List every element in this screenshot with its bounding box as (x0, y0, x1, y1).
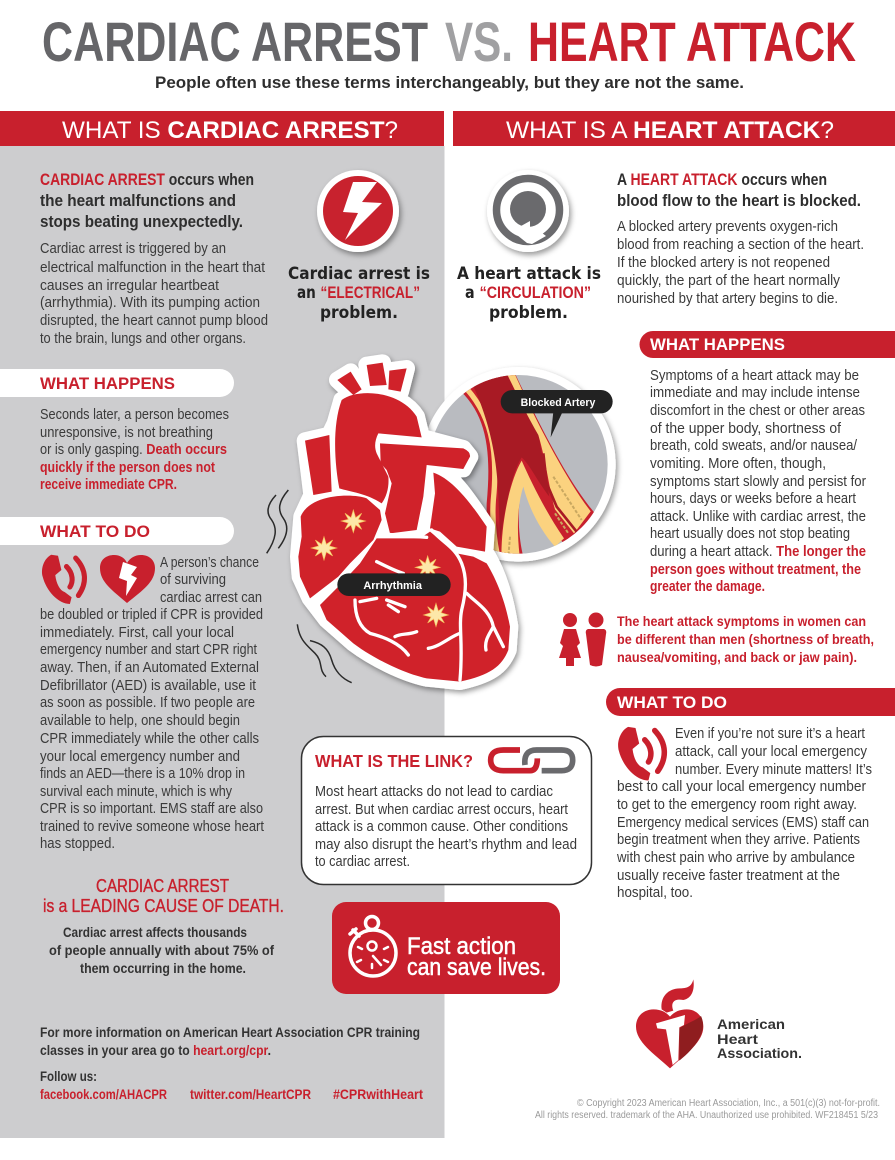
circulation problem caption: problem. (489, 303, 568, 323)
what to do text: cardiac arrest: finds an AED—there is a 10% drop in (40, 766, 245, 782)
logo heart and torch (636, 979, 703, 1068)
artery inset (421, 367, 616, 563)
link text: arrest. But when cardiac arrest occurs, heart (315, 802, 568, 818)
icon: chain link (491, 750, 573, 771)
what happens text: cardiac arrest: Seconds later, a person becomes (40, 407, 229, 423)
circulation problem caption: a “CIRCULATION” (465, 283, 591, 303)
leading cause heading: CARDIAC ARREST (96, 876, 229, 896)
follow us links: twitter.com/HeartCPR (190, 1087, 311, 1102)
what happens pill: cardiac arrest (0, 369, 234, 397)
more information text: classes in your area go to heart.org/cpr. (40, 1043, 271, 1058)
what happens text: heart attack: symptoms start slowly and persist for (650, 474, 866, 490)
women symptoms text (617, 613, 874, 665)
leading cause text (49, 924, 274, 976)
callout: fast action: Fast action (407, 933, 516, 960)
cardiac arrest explanation text: Cardiac arrest is triggered by an (40, 241, 226, 257)
cardiac arrest explanation text: (arrhythmia). With its pumping action (40, 295, 260, 311)
what to do bar: heart attack: WHAT TO DO (617, 694, 727, 712)
leading cause text: them occurring in the home. (80, 960, 246, 976)
circulation problem caption (457, 264, 601, 323)
panel: cardiac arrest background (0, 146, 444, 1138)
title: CARDIAC ARREST (42, 10, 428, 73)
heart attack definition heading: blood flow to the heart is blocked. (617, 192, 861, 210)
icon: woman and man (559, 612, 606, 666)
leading cause heading: is a LEADING CAUSE OF DEATH. (43, 896, 284, 916)
what to do text: cardiac arrest: A person’s chance (160, 555, 259, 571)
what to do text: heart attack: hospital, too. (617, 885, 693, 901)
header: what is cardiac arrest (0, 111, 444, 146)
what happens text: cardiac arrest: unresponsive, is not breathing (40, 425, 213, 441)
squiggles (267, 490, 352, 683)
link text: Most heart attacks do not lead to cardiac (315, 784, 553, 800)
icon: phone (618, 727, 664, 780)
what to do text: cardiac arrest: of surviving (160, 572, 226, 588)
electrical problem caption (288, 264, 430, 323)
link text: attack is a common cause. Other conditions (315, 819, 568, 835)
what to do text: cardiac arrest: trained to revive someone whose heart (40, 819, 264, 835)
what to do text: heart attack: usually receive faster treatment at the (617, 868, 840, 884)
women symptoms text: be different than men (shortness of breath, (617, 631, 874, 647)
what to do text: cardiac arrest (40, 555, 264, 852)
title (42, 10, 856, 73)
heart attack explanation text: quickly, the part of the heart normally (617, 273, 841, 289)
women symptoms text: nausea/vomiting, and back or jaw pain). (617, 649, 857, 665)
what to do text: cardiac arrest: emergency number and start CPR right (40, 642, 257, 658)
cardiac arrest definition heading (40, 171, 254, 231)
what happens bar: heart attack (640, 331, 895, 358)
label: Arrhythmia (337, 573, 451, 596)
what to do pill: cardiac arrest (0, 517, 234, 545)
cardiac arrest definition heading: stops beating unexpectedly. (40, 213, 243, 231)
what to do bar: heart attack (606, 688, 895, 716)
what to do text: heart attack: with chest pain who arrive by ambulance (616, 850, 855, 866)
label: Arrhythmia: Arrhythmia (363, 580, 423, 592)
what to do text: cardiac arrest: Defibrillator (AED) is available, use it (40, 678, 256, 694)
more information text: For more information on American Heart Association CPR training (40, 1025, 420, 1040)
heart illustration (267, 363, 616, 683)
electrical problem caption: Cardiac arrest is (288, 264, 430, 284)
what to do text: cardiac arrest: CPR is so important. EMS staff are also (40, 801, 263, 817)
what to do text: cardiac arrest: survival each minute, which is why (40, 784, 233, 800)
what to do text: cardiac arrest: away. Then, if an Automated External (40, 660, 259, 676)
what happens text: heart attack: hours, days or weeks before a heart (650, 491, 856, 507)
what to do text: cardiac arrest: cardiac arrest can (160, 590, 262, 606)
copyright (535, 1098, 880, 1121)
what happens text: heart attack: immediate and may include intense (650, 385, 860, 401)
leading cause text: of people annually with about 75% of (49, 942, 274, 958)
what happens text: cardiac arrest (40, 407, 229, 493)
what to do text: cardiac arrest: be doubled or tripled if CPR is provided (40, 607, 263, 623)
what to do text: heart attack: best to call your local emergency number (617, 779, 866, 795)
logo: American Heart Association (636, 979, 802, 1068)
electrical problem caption: problem. (320, 303, 398, 323)
heart attack definition heading (617, 171, 861, 210)
what to do text: cardiac arrest: your local emergency number and (40, 749, 240, 765)
leading cause text: Cardiac arrest affects thousands (63, 924, 247, 940)
cardiac arrest explanation text (40, 241, 268, 347)
what happens bar: heart attack: WHAT HAPPENS (650, 336, 785, 354)
what happens text: heart attack: discomfort in the chest or other areas (650, 403, 865, 419)
heart attack explanation text (617, 219, 864, 307)
what to do text: cardiac arrest: available to help, one should begin (40, 713, 240, 729)
what happens text: heart attack: vomiting. More often, though, (650, 456, 826, 472)
what to do text: heart attack: attack, call your local emergency (675, 744, 868, 760)
header: what is a heart attack: WHAT IS A HEART ATTACK? (506, 117, 834, 144)
what happens text: heart attack: greater the damage. (650, 579, 765, 595)
follow us links: #CPRwithHeart (333, 1087, 423, 1102)
heart attack definition heading: A HEART ATTACK occurs when (617, 171, 827, 189)
what to do text: heart attack (616, 726, 872, 901)
link heading: WHAT IS THE LINK? (315, 751, 473, 771)
what to do text: cardiac arrest: CPR immediately while the other calls (40, 731, 259, 747)
what to do text: heart attack: begin treatment when they arrive. Patients (617, 832, 860, 848)
cardiac arrest explanation text: electrical malfunction in the heart that (40, 260, 265, 276)
label: Blocked Artery (501, 390, 613, 437)
what to do text: cardiac arrest: as soon as possible. If two people are (40, 695, 255, 711)
cardiac arrest definition heading: the heart malfunctions and (40, 192, 236, 210)
cardiac arrest explanation text: disrupted, the heart cannot pump blood (40, 313, 268, 329)
what to do pill: cardiac arrest: WHAT TO DO (40, 523, 150, 541)
what happens text: heart attack: during a heart attack. The longer the (650, 544, 866, 560)
cardiac arrest definition heading: CARDIAC ARREST occurs when (40, 171, 254, 189)
callout: fast action (332, 902, 560, 994)
heart body (298, 363, 510, 682)
logo: American Heart Association: American (717, 1016, 785, 1032)
circulation problem caption: A heart attack is (457, 264, 601, 284)
what happens text: cardiac arrest: receive immediate CPR. (40, 477, 177, 493)
what happens text: cardiac arrest: or is only gasping. Death occurs (40, 442, 227, 458)
header: what is a heart attack (453, 111, 895, 146)
subtitle: People often use these terms interchangeably, but they are not the same. (155, 73, 744, 92)
icon: stopwatch (350, 916, 396, 976)
what happens text: heart attack: person goes without treatment, the (650, 562, 861, 578)
what happens text: heart attack: attack. Unlike with cardiac arrest, the (650, 509, 866, 525)
icon: phone (42, 555, 84, 604)
what to do text: cardiac arrest: immediately. First, call your local (40, 625, 234, 641)
what happens text: heart attack: Symptoms of a heart attack may be (650, 368, 859, 384)
leading cause heading (43, 876, 284, 916)
what happens text: heart attack: of the upper body, shortness of (650, 421, 842, 437)
follow us links (40, 1069, 423, 1102)
icon: AED heart (100, 555, 155, 603)
title: VS. (445, 10, 513, 73)
logo: American Heart Association: Association. (717, 1045, 802, 1061)
link text (315, 784, 577, 870)
what happens text: cardiac arrest: quickly if the person does not (40, 460, 215, 476)
women symptoms text: The heart attack symptoms in women can (617, 613, 866, 629)
link text: may also disrupt the heart’s rhythm and lead (315, 837, 577, 853)
what to do text: heart attack: number. Every minute matters! It’s (675, 762, 872, 778)
what happens text: heart attack: breath, cold sweats, and/or nausea/ (650, 438, 858, 454)
cardiac arrest explanation text: causes an irregular heartbeat (40, 278, 219, 294)
what to do text: heart attack: to get to the emergency room right away. (617, 797, 857, 813)
more information text (40, 1025, 420, 1058)
follow us links: Follow us: (40, 1069, 97, 1084)
what to do text: cardiac arrest: has stopped. (40, 836, 115, 852)
heart attack explanation text: A blocked artery prevents oxygen-rich (617, 219, 838, 235)
link text: to cardiac arrest. (315, 854, 410, 870)
what happens pill: cardiac arrest: WHAT HAPPENS (40, 375, 175, 393)
what happens text: heart attack: heart usually does not stop beating (650, 526, 850, 542)
heart attack explanation text: blood from reaching a section of the heart. (617, 237, 864, 253)
electrical problem caption: an “ELECTRICAL” (297, 283, 420, 303)
cardiac arrest explanation text: to the brain, lungs and other organs. (40, 331, 246, 347)
label: Blocked Artery: Blocked Artery (521, 397, 596, 409)
panel: what is the link (302, 736, 592, 884)
what to do text: heart attack: Even if you’re not sure it’s a heart (675, 726, 865, 742)
callout: fast action: can save lives. (407, 954, 546, 981)
follow us links: facebook.com/AHACPR (40, 1087, 167, 1102)
icon: circulation arrow (487, 170, 569, 252)
icon: lightning bolt (317, 170, 399, 252)
arrhythmia sparks (311, 510, 448, 627)
heart attack explanation text: If the blocked artery is not reopened (617, 255, 830, 271)
header: what is cardiac arrest: WHAT IS CARDIAC ARREST? (62, 117, 398, 144)
coronary vessels (355, 530, 503, 680)
heart attack explanation text: nourished by that artery begins to die. (617, 291, 838, 307)
what happens text: heart attack (650, 368, 866, 595)
logo: American Heart Association: Heart (717, 1031, 758, 1047)
